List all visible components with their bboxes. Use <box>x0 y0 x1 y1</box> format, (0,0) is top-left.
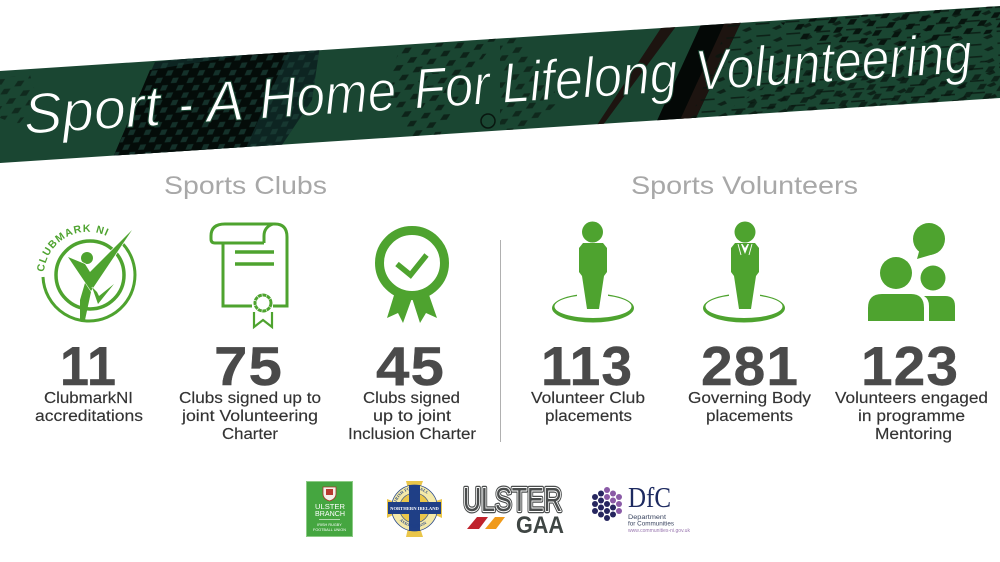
logo: department for communities: for Communities <box>628 520 675 528</box>
title <box>22 21 974 147</box>
stat: volunteering charter: Charter <box>222 426 278 443</box>
logo: irish football association: NORTHERN IRELAND <box>390 506 440 511</box>
stat: programme mentoring: 123 <box>861 335 959 397</box>
stat: inclusion charter: Inclusion Charter <box>348 426 476 443</box>
logo: ulster gaa: ULSTER <box>463 481 562 518</box>
banner <box>0 0 1000 163</box>
logo: department for communities: DfC <box>628 483 671 514</box>
panel: sports volunteers <box>531 172 988 443</box>
stat: volunteer club placements: placements <box>545 408 632 425</box>
stat: inclusion charter <box>348 335 476 443</box>
logo: irish football association: IRISH FOOTBALL <box>394 488 428 502</box>
stat: volunteering charter <box>179 335 321 443</box>
heading: sports clubs: Sports Clubs <box>164 172 327 200</box>
title: For <box>412 53 494 122</box>
icon: rosette <box>380 230 444 323</box>
stat: volunteering charter: 75 <box>214 335 283 397</box>
stat: governing body placements: Governing Body <box>688 390 811 407</box>
logo: ulster branch irfu: FOOTBALL UNION <box>313 528 346 532</box>
stat: volunteer club placements: 113 <box>541 335 633 397</box>
stat: inclusion charter: Clubs signed <box>363 390 460 407</box>
icon: suited volunteer on target <box>703 222 785 322</box>
stat: governing body placements: placements <box>706 408 793 425</box>
icon: volunteer on target <box>552 222 634 322</box>
stat: programme mentoring <box>835 335 988 443</box>
logo: ulster gaa: GAA <box>516 512 564 539</box>
logo: ulster gaa: ULSTER <box>463 481 562 518</box>
title: Home <box>257 59 398 132</box>
logos <box>306 481 690 539</box>
logo: ulster branch irfu: BRANCH <box>315 509 345 518</box>
logo: department for communities: www.communities-ni.gov.uk <box>628 528 690 534</box>
logo: irish football association: ASSOCIATION <box>400 519 426 527</box>
logo: department for communities <box>592 483 690 534</box>
stat: clubmark accreditations <box>35 335 143 425</box>
stat: clubmark accreditations: 11 <box>60 335 117 397</box>
icon: clubmark ni logo: CLUBMARK NI <box>37 224 109 272</box>
title: Lifelong <box>500 41 680 116</box>
stat: clubmark accreditations: accreditations <box>35 408 143 425</box>
title: A <box>201 69 245 135</box>
logo: irish football association <box>387 481 442 537</box>
stat: programme mentoring: Mentoring <box>875 426 952 443</box>
logo: ulster branch irfu: IRISH RUGBY <box>317 523 342 527</box>
stat: clubmark accreditations: ClubmarkNI <box>44 390 133 407</box>
stat: volunteer club placements <box>531 335 645 425</box>
icon: charter scroll <box>211 224 287 327</box>
icon: mentoring group <box>868 223 955 321</box>
title: Sport <box>22 74 165 147</box>
title: - <box>176 72 194 137</box>
logo: ulster gaa <box>463 481 564 539</box>
logo: department for communities: Department <box>628 514 666 521</box>
stat: governing body placements <box>688 335 811 425</box>
stat: volunteering charter: joint Volunteering <box>181 408 318 425</box>
stat: governing body placements: 281 <box>701 335 799 397</box>
stat: programme mentoring: in programme <box>858 408 965 425</box>
stat: programme mentoring: Volunteers engaged <box>835 390 988 407</box>
icon: clubmark ni logo <box>37 224 136 322</box>
panel: sports clubs <box>35 172 476 443</box>
stat: volunteer club placements: Volunteer Club <box>531 390 645 407</box>
heading: sports volunteers: Sports Volunteers <box>631 172 858 200</box>
stat: volunteering charter: Clubs signed up to <box>179 390 321 407</box>
logo: ulster branch irfu: ULSTER <box>315 502 345 511</box>
stat: inclusion charter: 45 <box>376 335 445 397</box>
stat: inclusion charter: up to joint <box>373 408 452 425</box>
logo: ulster branch irfu <box>306 482 352 536</box>
